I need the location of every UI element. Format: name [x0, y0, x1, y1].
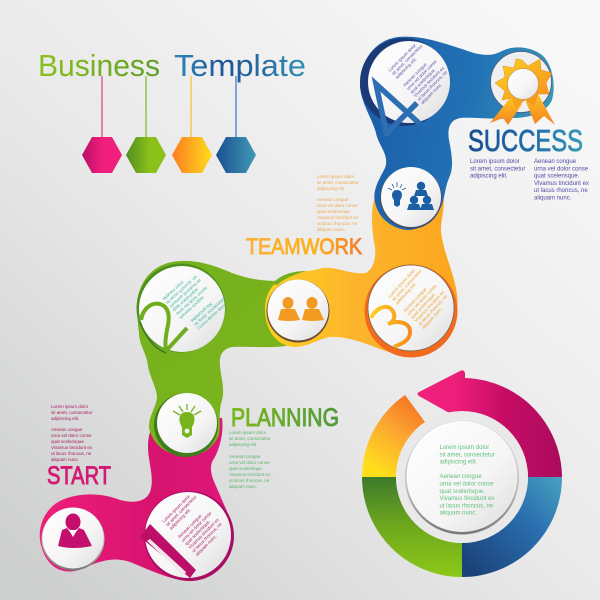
- centre disc: Vivamus tincidunt ex: [440, 496, 494, 502]
- circle: step 3: [368, 265, 454, 351]
- text: teamwork copy: ut lacus rhoncus, ne: [317, 221, 358, 226]
- circle: step 4: [368, 39, 453, 136]
- circle: step 4: Lorem ipsum dolor: [387, 42, 417, 73]
- chart: cycle ring: [362, 370, 562, 577]
- circle: book step 1: ut lacus rhoncus, ne: [191, 521, 223, 553]
- circle: book step 1: [140, 490, 231, 578]
- text: success copy: [470, 159, 589, 202]
- segment: orange: [362, 395, 425, 477]
- circle: step 2: quat scelerisque.: [172, 286, 200, 313]
- circle: step 2: ut lacus rhoncus, ne: [165, 274, 199, 305]
- circle: step 2: aliquam nunc.: [162, 279, 186, 302]
- text: start copy: quat scelerisque.: [51, 439, 85, 444]
- centre disc: Aenean congue: [440, 474, 482, 480]
- circle: book step 1: adipiscing elit.: [168, 507, 192, 531]
- circle: step 3: Aenean congue: [402, 286, 428, 313]
- centre disc: [396, 411, 528, 543]
- panel: start ribbon: [40, 418, 234, 581]
- circle: step 4: quat scelerisque.: [409, 67, 437, 95]
- text: start copy: aliquam nunc.: [51, 457, 79, 462]
- text: planning copy: Aenean congue: [229, 454, 261, 459]
- text: start copy: Lorem ipsum dolor: [51, 404, 89, 409]
- text: success copy: Aenean congue: [534, 159, 577, 165]
- circle: step 2: Lorem ipsum dolor: [196, 302, 228, 331]
- panel: planning ribbon: [136, 261, 300, 457]
- text: planning copy: ut lacus rhoncus, ne: [229, 478, 270, 483]
- text: planning copy: Lorem ipsum dolor: [229, 430, 267, 435]
- circle: step 4: aliquam nunc.: [420, 82, 443, 105]
- centre disc: aliquam nunc.: [440, 511, 477, 517]
- circle: book step 1: urna vel dolor conse: [180, 510, 213, 543]
- circle: step 2: sit amet, consectetur: [193, 295, 228, 327]
- circle: book step 1: Aenean congue: [177, 513, 203, 539]
- text: start copy: Vivamus tincidunt ex: [51, 445, 93, 450]
- centre disc: quat scelerisque.: [440, 489, 485, 495]
- text: start copy: ut lacus rhoncus, ne: [51, 451, 92, 456]
- text: success copy: aliquam nunc.: [534, 196, 572, 202]
- text: teamwork copy: aliquam nunc.: [317, 227, 345, 232]
- heading: teamwork: TEAMWORK: [246, 234, 362, 259]
- text: success copy: Vivamus tincidunt ex: [534, 181, 589, 187]
- circle: step 3: Lorem ipsum dolor: [387, 268, 416, 299]
- text: success copy: urna vel dolor conse: [534, 166, 589, 172]
- circle: step 2: Vivamus tincidunt ex: [168, 277, 203, 309]
- circle: step 4: sit amet, consectetur: [391, 43, 424, 76]
- title: [38, 48, 306, 83]
- circle: step 2: [139, 266, 231, 353]
- circle: step 4: Vivamus tincidunt ex: [413, 65, 446, 98]
- heading: start: START: [47, 462, 111, 490]
- circle: book step 1: sit amet, consectetur: [165, 494, 198, 527]
- circle: step 3: urna vel dolor conse: [406, 283, 438, 316]
- circle: step 4: adipiscing elit.: [394, 56, 418, 80]
- text: teamwork copy: sit amet, consectetur: [317, 180, 359, 185]
- circle: step 3: aliquam nunc.: [421, 306, 443, 330]
- icon: person circle: [42, 508, 104, 570]
- text: planning copy: Vivamus tincidunt ex: [229, 472, 271, 477]
- circle: step 2: adipiscing elit.: [190, 301, 214, 324]
- text: start copy: adipiscing elit.: [51, 416, 79, 421]
- icon: users circle: [266, 280, 330, 342]
- text: teamwork copy: adipiscing elit.: [317, 186, 345, 191]
- title: Business: [38, 48, 160, 83]
- circle: step 3: Vivamus tincidunt ex: [413, 289, 446, 323]
- segment: blue: [462, 477, 562, 577]
- panel: teamwork ribbon: [265, 170, 458, 358]
- circle: step 4: urna vel dolor conse: [406, 59, 438, 91]
- text: start copy: urna vel dolor conse: [51, 433, 92, 438]
- title: Template: [174, 48, 306, 83]
- icon: bulb circle: [154, 393, 218, 457]
- icon: team circle: [380, 167, 442, 229]
- centre disc: ut lacus rhoncus, ne: [440, 503, 494, 509]
- centre disc: adipiscing elit.: [440, 460, 478, 466]
- circle: step 4: Aenean congue: [402, 61, 428, 88]
- text: teamwork copy: quat scelerisque.: [317, 209, 351, 214]
- segment: green: [362, 477, 462, 577]
- circle: step 2: Aenean congue: [178, 295, 206, 320]
- text: success copy: Lorem ipsum dolor: [470, 159, 520, 165]
- circle: step 3: ut lacus rhoncus, ne: [417, 293, 449, 327]
- centre disc: sit amet, consectetur: [440, 452, 495, 458]
- text: planning copy: aliquam nunc.: [229, 484, 257, 489]
- circle: book step 1: aliquam nunc.: [194, 534, 218, 557]
- centre disc: Lorem ipsum dolor: [440, 445, 489, 451]
- text: teamwork copy: Vivamus tincidunt ex: [317, 215, 359, 220]
- text: planning copy: quat scelerisque.: [229, 466, 263, 471]
- text: success copy: quat scelerisque.: [534, 174, 580, 180]
- circle: step 2: urna vel dolor conse: [175, 285, 209, 316]
- icon: medal: [490, 52, 555, 125]
- circle: step 3: quat scelerisque.: [410, 292, 437, 320]
- text: planning copy: sit amet, consectetur: [229, 436, 271, 441]
- text: start copy: sit amet, consectetur: [51, 410, 93, 415]
- centre disc: urna vel dolor conse: [440, 482, 494, 488]
- text: success copy: sit amet, consectetur: [470, 166, 525, 172]
- circle: book step 1: Lorem ipsum dolor: [161, 493, 191, 524]
- text: planning copy: urna vel dolor conse: [229, 460, 270, 465]
- circle: book step 1: quat scelerisque.: [184, 519, 211, 546]
- panel: success ribbon: [360, 37, 555, 230]
- text: teamwork copy: Lorem ipsum dolor: [317, 174, 355, 179]
- hexagon legend: [82, 76, 256, 173]
- text: planning copy: adipiscing elit.: [229, 442, 257, 447]
- circle: book step 1: Vivamus tincidunt ex: [187, 517, 221, 550]
- circle: step 3: adipiscing elit.: [394, 281, 417, 306]
- circle: step 4: ut lacus rhoncus, ne: [416, 69, 449, 102]
- text: success copy: adipiscing elit.: [470, 174, 508, 180]
- heading: planning: PLANNING: [231, 404, 339, 432]
- circle: step 3: sit amet, consectetur: [391, 268, 423, 302]
- text: teamwork copy: Aenean congue: [317, 197, 349, 202]
- text: success copy: ut lacus rhoncus, ne: [534, 188, 588, 194]
- arrow: magenta: [418, 370, 562, 477]
- text: start copy: Aenean congue: [51, 427, 83, 432]
- text: teamwork copy: urna vel dolor conse: [317, 203, 358, 208]
